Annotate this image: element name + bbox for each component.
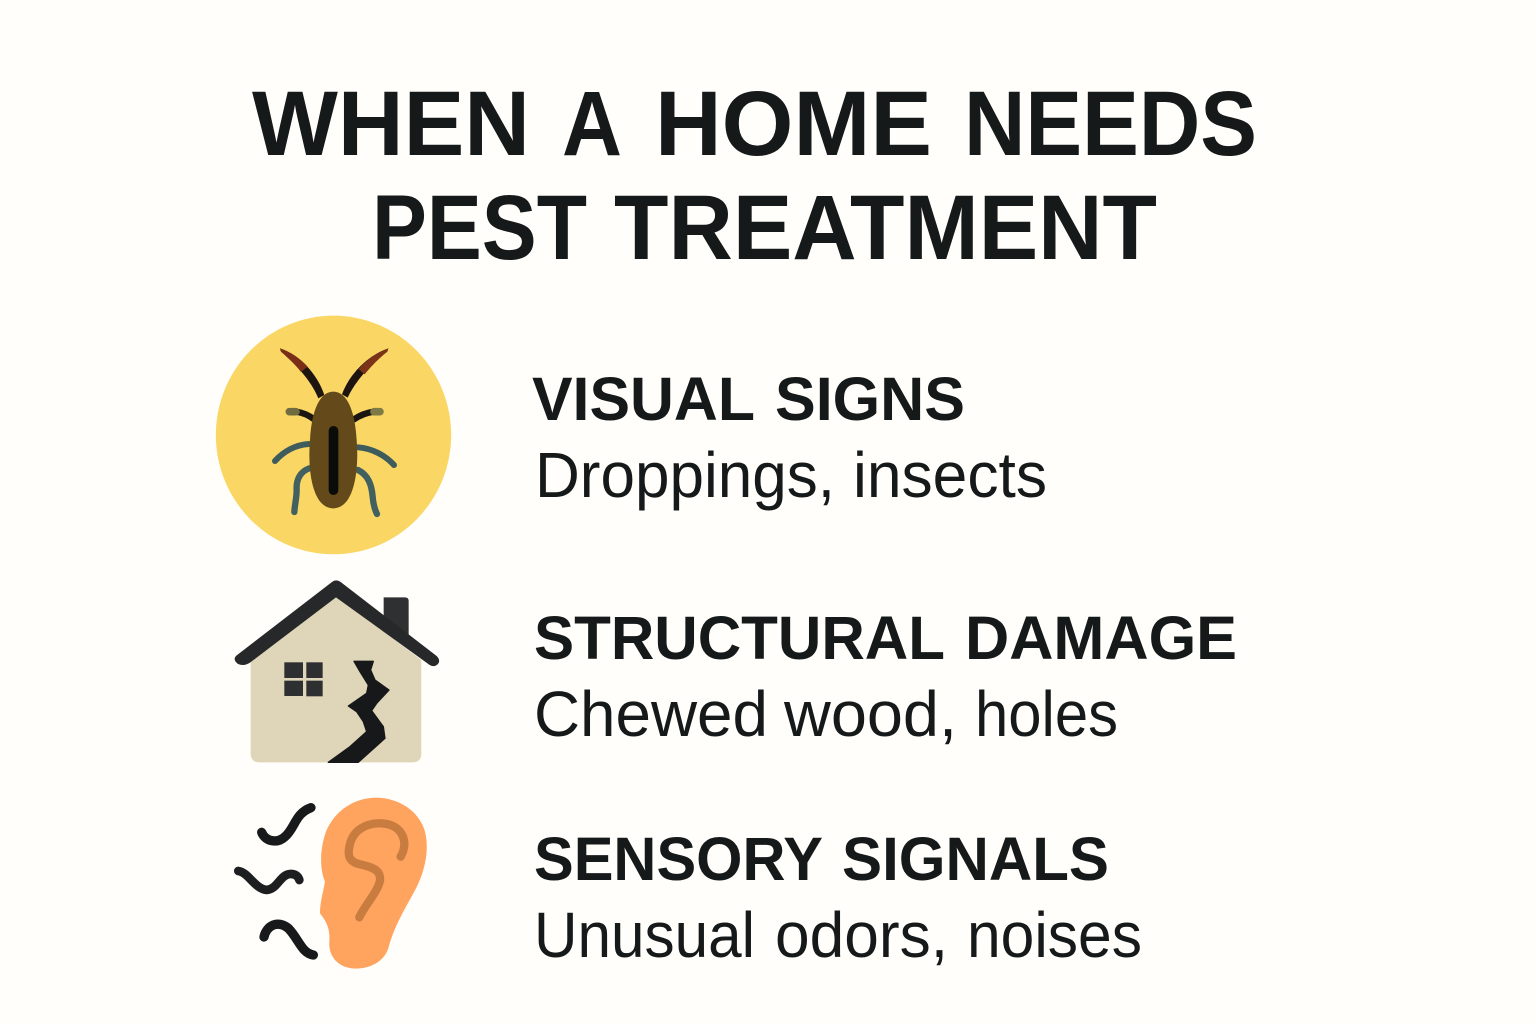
text block: visual signs: insects [853, 439, 1047, 511]
text block: sensory signals: SIGNALS [842, 825, 1109, 893]
text block: sensory signals [534, 825, 1142, 971]
text block: visual signs: Droppings, [535, 439, 835, 511]
icon: house with crack [235, 580, 439, 762]
text block: structural damage: DAMAGE [965, 604, 1237, 672]
text block: sensory signals: noises [967, 899, 1142, 971]
text block: visual signs: SIGNS [775, 365, 965, 433]
text block: structural damage: STRUCTURAL [534, 604, 945, 672]
title: PEST [372, 177, 587, 279]
title [252, 73, 1257, 279]
title: A [562, 73, 622, 175]
text block: visual signs [532, 365, 1047, 511]
icon: beetle on yellow circle [216, 316, 451, 554]
title: WHEN [252, 73, 530, 175]
title: TREATMENT [614, 177, 1157, 279]
text block: structural damage: Chewed [534, 678, 768, 750]
text block: sensory signals: Unusual [534, 899, 755, 971]
title: HOME [655, 73, 932, 175]
icon: ear with odor and noise waves [238, 798, 427, 969]
text block: structural damage [534, 604, 1237, 750]
text block: structural damage: wood, [783, 678, 957, 750]
text block: structural damage: holes [975, 678, 1118, 750]
text block: sensory signals: SENSORY [534, 825, 823, 893]
title: NEEDS [964, 73, 1257, 175]
text block: sensory signals: odors, [775, 899, 948, 971]
text block: visual signs: VISUAL [532, 365, 755, 433]
